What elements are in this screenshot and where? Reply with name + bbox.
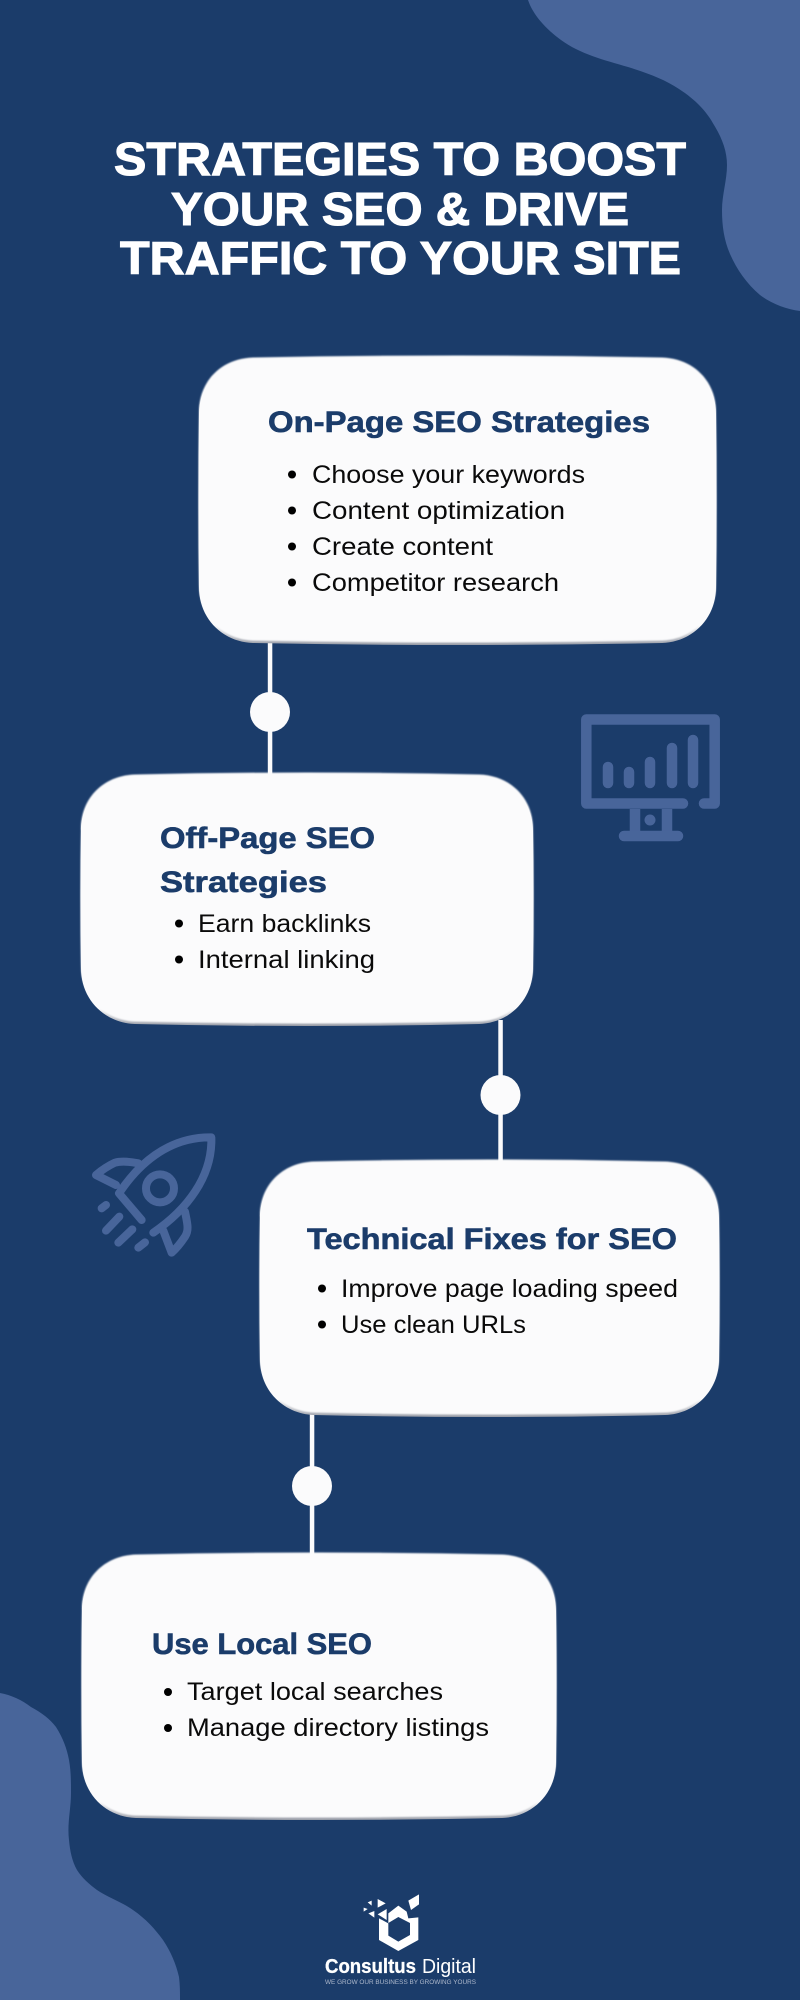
list: local <box>164 1678 489 1742</box>
list: on-page: Choose your keywords <box>312 461 585 489</box>
logo mark <box>364 1894 419 1951</box>
list: technical: Improve page loading speed <box>341 1275 678 1303</box>
connector 1 <box>250 640 290 780</box>
list: on-page: Competitor research <box>312 569 559 597</box>
decorative blob: top right <box>528 0 800 311</box>
panel: off-page SEO strategies <box>80 772 534 1026</box>
logo tagline: WE GROW OUR BUSINESS BY GROWING YOURS <box>325 1979 477 1986</box>
heading: technical: Technical Fixes for SEO <box>307 1223 677 1256</box>
logo: Consultus Digital <box>325 1894 477 1986</box>
list: on-page: Content optimization <box>312 497 565 525</box>
list: on-page: Create content <box>312 533 493 561</box>
heading: off-page: Strategies <box>160 866 327 899</box>
panel: local SEO <box>82 1552 556 1820</box>
list: technical: Use clean URLs <box>341 1311 526 1339</box>
heading: local: Use Local SEO <box>152 1628 372 1661</box>
heading: on-page: On-Page SEO Strategies <box>268 406 650 439</box>
title: STRATEGIES TO BOOST <box>114 133 686 185</box>
heading: off-page: Off-Page SEO <box>160 822 375 855</box>
title <box>114 133 686 284</box>
list: on-page <box>288 461 585 597</box>
list: local: Manage directory listings <box>187 1714 489 1742</box>
icon: rocket <box>96 1137 211 1253</box>
connector 2 <box>480 1020 520 1165</box>
list: off-page: Earn backlinks <box>198 910 371 938</box>
heading: off-page <box>160 822 375 899</box>
panel: technical fixes <box>260 1160 720 1417</box>
list: local: Target local searches <box>187 1678 443 1706</box>
title: TRAFFIC TO YOUR SITE <box>120 232 681 284</box>
logo wordmark: Consultus <box>325 1956 416 1978</box>
list: off-page <box>175 910 375 974</box>
decorative blob: bottom left <box>0 1693 180 2000</box>
title: YOUR SEO & DRIVE <box>171 183 629 235</box>
logo wordmark: Digital <box>422 1956 476 1978</box>
list: off-page: Internal linking <box>198 946 375 974</box>
icon: monitor with bar chart <box>586 720 715 836</box>
connector 3 <box>292 1410 332 1560</box>
list: technical <box>318 1275 678 1339</box>
logo wordmark <box>325 1956 476 1978</box>
panel: on-page SEO strategies <box>198 356 716 645</box>
